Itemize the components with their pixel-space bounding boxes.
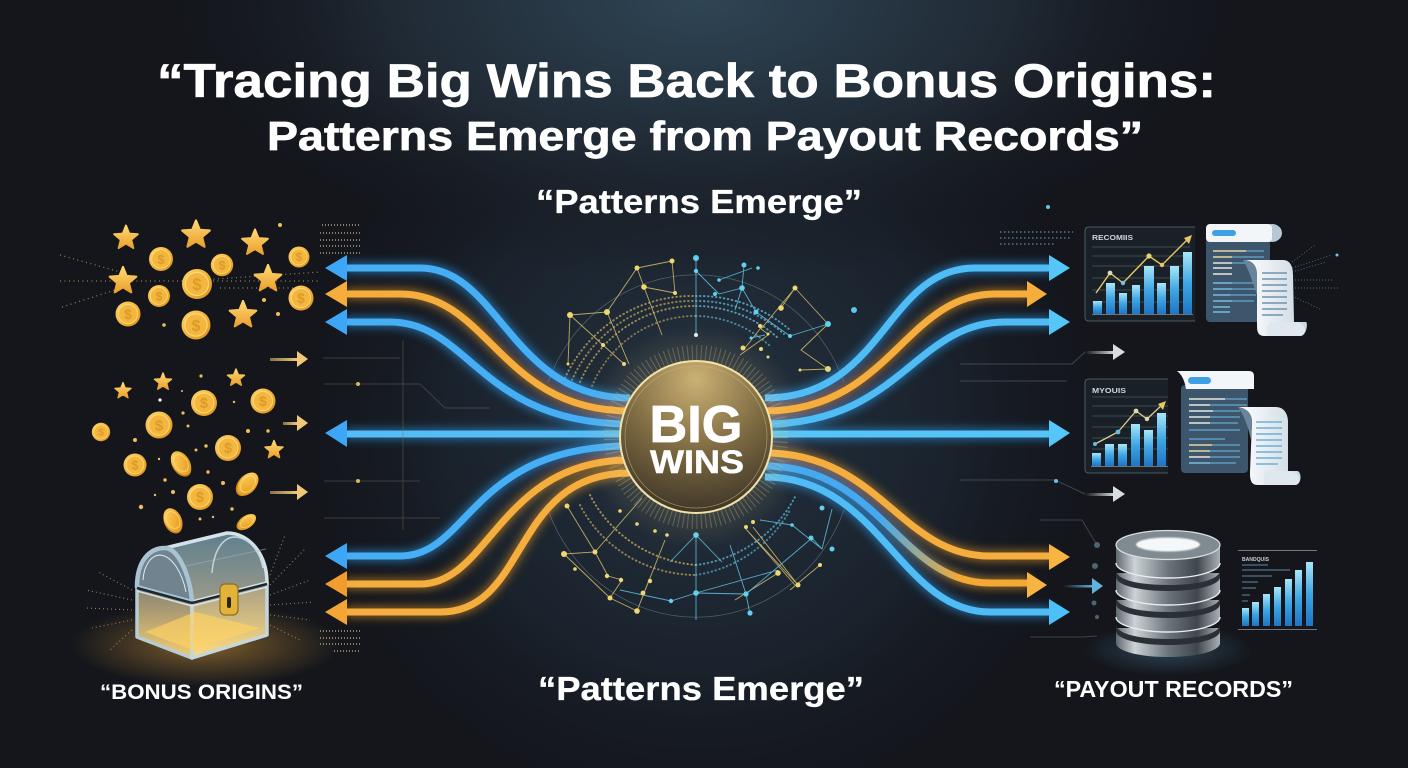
title: “Tracing Big Wins Back to Bonus Origins: (157, 54, 1216, 107)
icons: coins rising from chest: $ (259, 394, 267, 409)
network: lower dome (548, 495, 844, 620)
heading: patterns emerge bottom: “Patterns Emerge” (538, 670, 864, 707)
central hub: big wins: BIG (650, 396, 742, 454)
icons: star and coin cluster, top: $ (192, 318, 201, 335)
label: payout records: “PAYOUT RECORDS” (1054, 676, 1293, 702)
icons: coins rising from chest: $ (155, 418, 164, 434)
arrowheads: right (1027, 255, 1070, 625)
flow lines: left side (340, 268, 630, 612)
icons: star and coin cluster, top (60, 220, 320, 340)
label: bonus origins: “BONUS ORIGINS” (100, 681, 303, 704)
decorative circuit lines: right (960, 232, 1097, 637)
icons: coins rising from chest: $ (98, 428, 104, 439)
icons: coins rising from chest: $ (196, 490, 204, 506)
icons: star and coin cluster, top: $ (192, 276, 202, 294)
panel: records chart: RECOMIIS (1092, 233, 1133, 242)
title: Patterns Emerge from Payout Records” (267, 113, 1143, 159)
central hub: big wins: WINS (650, 444, 744, 480)
icons: coins rising from chest (92, 369, 283, 537)
arrowheads: left (325, 255, 347, 625)
icons: coins rising from chest: $ (131, 459, 139, 473)
icons: star and coin cluster, top: $ (157, 252, 165, 267)
accents: small dots (356, 205, 1100, 619)
panel: payouts chart (1085, 379, 1168, 473)
panel: payouts chart: MYOUIS (1092, 386, 1126, 395)
central hub: big wins (584, 325, 808, 549)
icon: database cylinder (1083, 530, 1253, 676)
heading: patterns emerge top: “Patterns Emerge” (536, 183, 862, 220)
arrows: small gold (270, 351, 308, 500)
icon: treasure chest (70, 533, 340, 687)
panel: records chart (1085, 227, 1195, 321)
panel: database bar chart (1238, 550, 1317, 630)
icons: star and coin cluster, top: $ (124, 307, 132, 322)
icon: document and receipt 2 (1177, 371, 1301, 485)
icons: coins rising from chest: $ (200, 396, 208, 412)
panel: database bar chart: BANDQUIS (1242, 557, 1269, 563)
title (157, 54, 1216, 159)
icons: star and coin cluster, top: $ (296, 252, 303, 264)
icons: coins rising from chest: $ (224, 441, 232, 457)
arrows: small gray and blue (1063, 344, 1125, 594)
icons: star and coin cluster, top: $ (156, 289, 163, 303)
icon: document and receipt 1 (1206, 224, 1338, 336)
decorative circuit lines: left (320, 225, 490, 651)
icons: star and coin cluster, top: $ (219, 258, 226, 272)
icons: star and coin cluster, top: $ (297, 291, 305, 306)
flow lines: right side (765, 268, 1052, 612)
network: upper dome (548, 255, 844, 386)
